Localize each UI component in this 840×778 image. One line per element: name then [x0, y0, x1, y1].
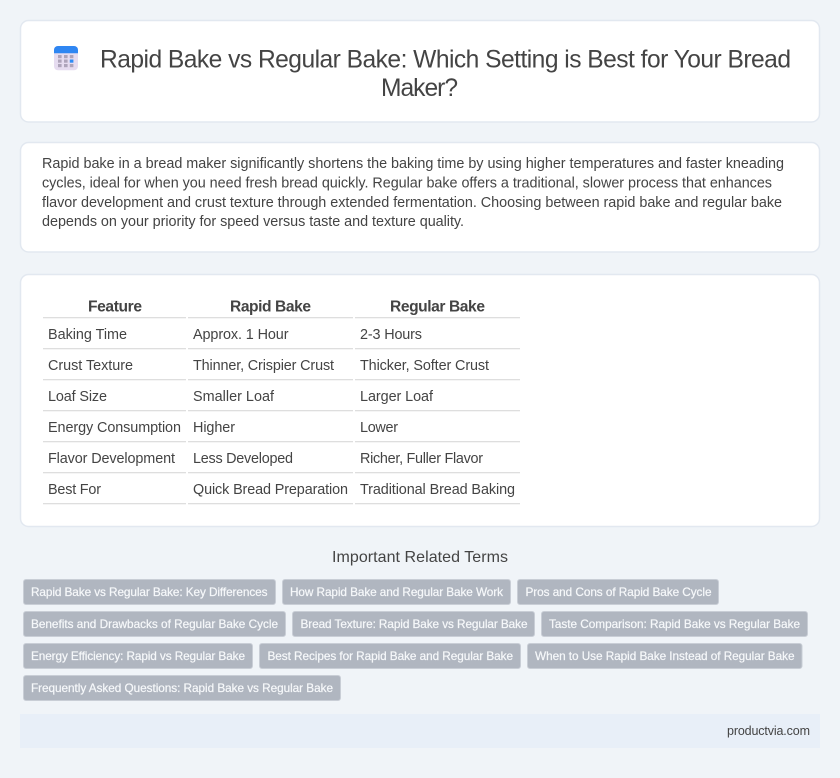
footer: [20, 714, 820, 748]
text block: introduction paragraph: depends on your priority for speed versus taste and texture quality.: [42, 214, 464, 230]
table row: energy consumption: Higher: [193, 420, 235, 436]
table row: flavor development: Less Developed: [193, 451, 293, 467]
text block: introduction paragraph: Rapid bake in a bread maker significantly shortens the baking time by using higher temperatures and faster kneading: [42, 156, 784, 172]
table header row: Regular Bake: [390, 298, 485, 316]
tag: When to Use Rapid Bake Instead of Regular Bake: [535, 649, 795, 663]
tag: [518, 580, 718, 604]
table row: best for: Quick Bread Preparation: [193, 482, 348, 498]
table row: baking time: Approx. 1 Hour: [193, 327, 289, 343]
table row: baking time: [43, 327, 520, 349]
tag: Pros and Cons of Rapid Bake Cycle: [526, 585, 712, 599]
tag: [542, 612, 808, 636]
tag: Frequently Asked Questions: Rapid Bake vs Regular Bake: [31, 681, 333, 695]
table row: flavor development: [43, 451, 520, 473]
table row: crust texture: Thinner, Crispier Crust: [193, 358, 334, 374]
table row: baking time: 2-3 Hours: [360, 327, 422, 343]
table row: loaf size: Larger Loaf: [360, 389, 434, 405]
table row: best for: Traditional Bread Baking: [360, 482, 515, 498]
table row: baking time: Baking Time: [48, 327, 127, 343]
table row: energy consumption: Lower: [360, 420, 398, 436]
title: Maker?: [381, 75, 458, 102]
table row: energy consumption: Energy Consumption: [48, 420, 181, 436]
tag: [260, 644, 520, 668]
tag: [24, 644, 252, 668]
tag list: related terms: [24, 580, 808, 700]
tag: Taste Comparison: Rapid Bake vs Regular Bake: [549, 617, 800, 631]
table row: flavor development: Richer, Fuller Flavor: [360, 451, 483, 467]
tag: [24, 612, 286, 636]
icon: calendar: [54, 46, 78, 70]
tag: Bread Texture: Rapid Bake vs Regular Bake: [300, 617, 528, 631]
tag: [282, 580, 510, 604]
table header row: Feature: [88, 298, 142, 316]
table row: loaf size: [43, 389, 520, 411]
table row: crust texture: [43, 358, 520, 380]
tag: Best Recipes for Rapid Bake and Regular Bake: [268, 649, 513, 663]
tag: Energy Efficiency: Rapid vs Regular Bake: [31, 649, 245, 663]
table header row: [43, 298, 520, 318]
heading: important related terms: Important Related Terms: [332, 549, 508, 566]
footer source text: productvia.com: [727, 724, 810, 738]
tag: [528, 644, 802, 668]
table row: best for: [43, 482, 520, 504]
title: Rapid Bake vs Regular Bake: Which Setting is Best for Your Bread: [100, 46, 791, 74]
text block: introduction paragraph: cycles, ideal for when you need fresh bread quickly. Regular bake offers a traditional, slower process that enhances: [42, 176, 772, 192]
table row: loaf size: Smaller Loaf: [193, 389, 275, 405]
tag: How Rapid Bake and Regular Bake Work: [290, 585, 503, 599]
table row: loaf size: Loaf Size: [48, 389, 107, 405]
table row: best for: Best For: [48, 482, 101, 498]
panel: introduction: [20, 142, 820, 252]
panel: comparison table: [20, 274, 820, 526]
tag: [24, 580, 276, 604]
table row: crust texture: Thicker, Softer Crust: [360, 358, 489, 374]
tag: [24, 676, 340, 700]
table row: crust texture: Crust Texture: [48, 358, 133, 374]
tag: [292, 612, 534, 636]
tag: Rapid Bake vs Regular Bake: Key Differences: [31, 585, 268, 599]
panel: header: [20, 20, 820, 122]
table row: flavor development: Flavor Development: [48, 451, 175, 467]
text block: introduction paragraph: flavor development and crust texture through extended fermentation. Choosing between rapid bake and regular bake: [42, 195, 782, 211]
tag: Benefits and Drawbacks of Regular Bake Cycle: [31, 617, 278, 631]
table header row: Rapid Bake: [230, 298, 311, 316]
table row: energy consumption: [43, 420, 520, 442]
